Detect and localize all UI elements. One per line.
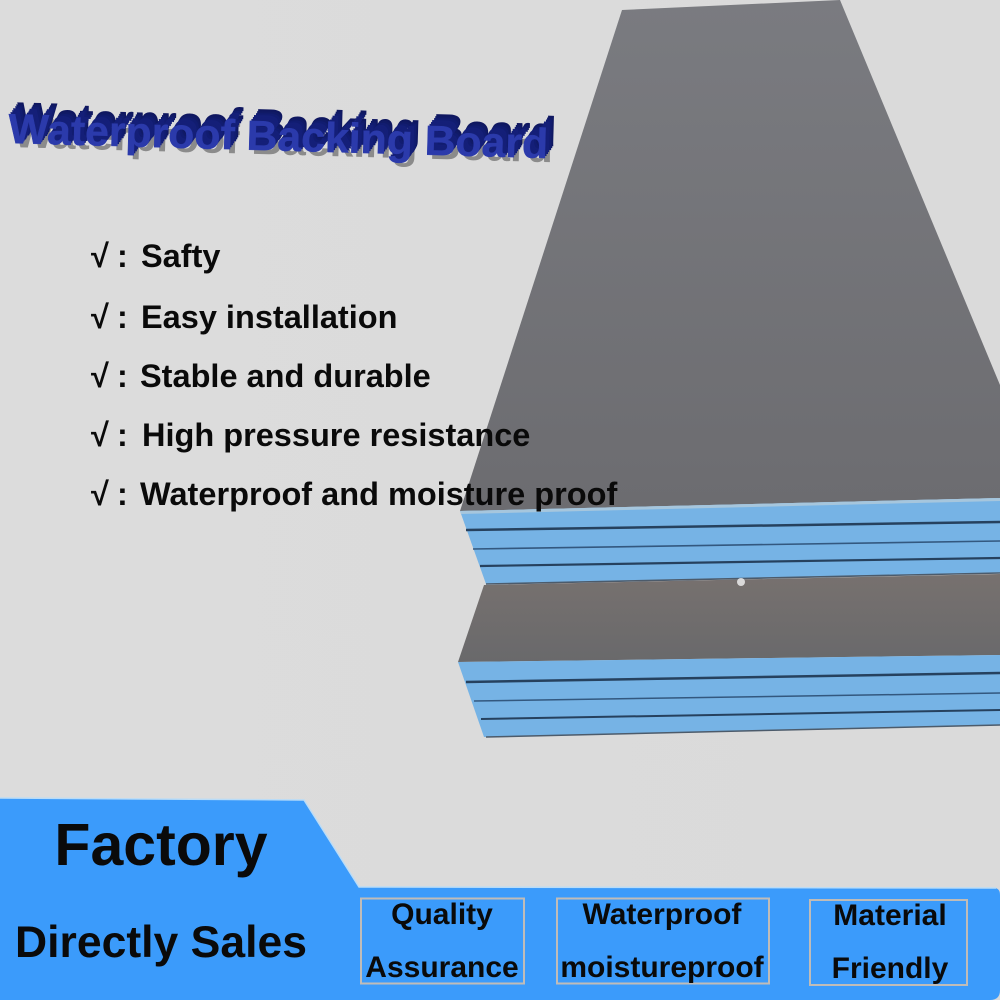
upper board top face (460, 0, 1000, 511)
title: Waterproof Backing Board: Waterproof Backing Board (8, 105, 549, 167)
upper board stack (460, 0, 1000, 584)
bottom blue banner (0, 798, 1000, 1000)
upper board blue side (460, 498, 1000, 584)
feature: high pressure resistance: High pressure resistance (142, 417, 530, 453)
badge: Waterproof moistureproof (557, 898, 769, 984)
feature: waterproof and moisture proof: √ (91, 476, 109, 512)
feature: stable and durable: : (117, 358, 128, 394)
feature: safety (91, 238, 220, 274)
title: Waterproof Backing Board: Waterproof Backing Board (14, 97, 555, 159)
lower board top face (458, 574, 1000, 662)
feature: safety: √ (91, 238, 109, 274)
title: Waterproof Backing Board: Waterproof Backing Board (16, 93, 557, 155)
badge: Waterproof moistureproof: moistureproof (560, 951, 765, 984)
feature: high pressure resistance: : (117, 417, 128, 453)
feature: high pressure resistance: √ (91, 417, 109, 453)
title: Waterproof Backing Board: Waterproof Backing Board (13, 109, 554, 171)
feature: easy installation: Easy installation (141, 299, 397, 335)
feature: waterproof and moisture proof: Waterproof and moisture proof (140, 476, 617, 512)
heading: Directly Sales: Directly Sales (15, 918, 307, 967)
feature: safety: Safty (141, 238, 220, 274)
title: Waterproof Backing Board: Waterproof Backing Board (11, 101, 552, 163)
badge: Material Friendly (810, 899, 967, 985)
feature: easy installation: : (117, 299, 128, 335)
feature: waterproof and moisture proof: : (117, 476, 128, 512)
badge: Material Friendly: Friendly (832, 952, 949, 985)
feature: safety: : (117, 238, 128, 274)
badge: Waterproof moistureproof: Waterproof (583, 898, 742, 931)
feature: stable and durable: √ (91, 358, 109, 394)
badge: Quality Assurance: Assurance (365, 951, 519, 984)
heading: Factory: Factory (54, 812, 268, 878)
feature list (91, 238, 617, 512)
light glare (737, 578, 745, 586)
badge: Quality Assurance: Quality (391, 898, 493, 931)
lower board blue side (458, 655, 1000, 737)
feature: easy installation: √ (91, 299, 109, 335)
title: Waterproof Backing Board: Waterproof Backing Board (12, 99, 553, 161)
lower board stack (458, 574, 1000, 737)
title: Waterproof Backing Board: Waterproof Backing Board (15, 95, 556, 157)
title: Waterproof Backing Board: Waterproof Backing Board (9, 103, 550, 165)
feature: stable and durable: Stable and durable (140, 358, 431, 394)
badge: Material Friendly: Material (833, 899, 947, 932)
badge: Quality Assurance (361, 898, 524, 984)
